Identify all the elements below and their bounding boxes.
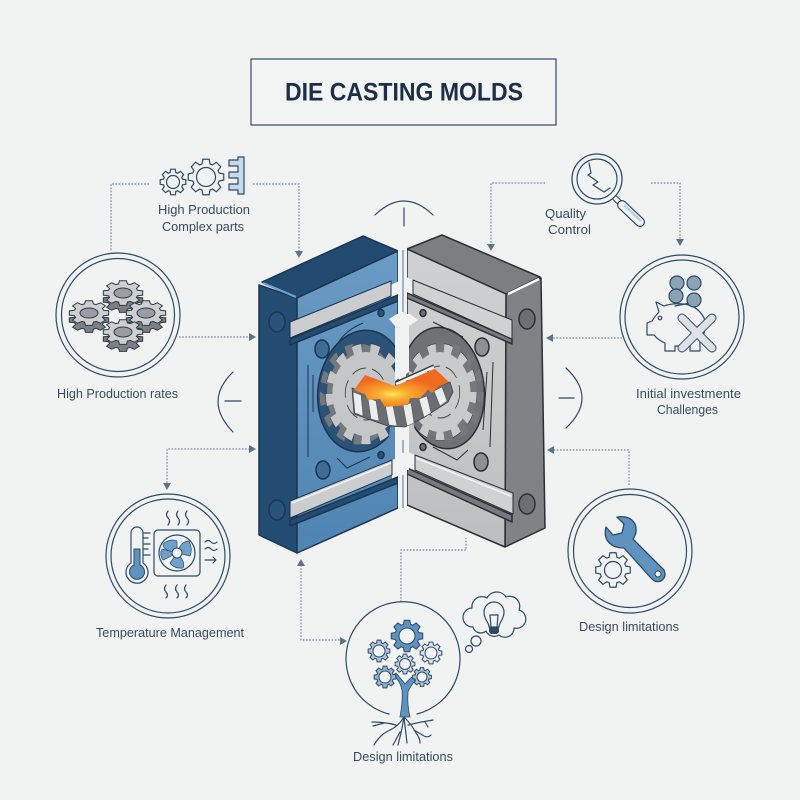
decorative arc: left — [218, 372, 241, 432]
molten metal — [354, 366, 449, 407]
label: High Production — [158, 203, 250, 217]
label: Design limitations — [579, 620, 679, 634]
title: DIE CASTING MOLDS — [285, 78, 523, 106]
right mold half (grey) — [394, 235, 545, 547]
connector arrow: investment to mold — [546, 334, 622, 342]
ring — [56, 253, 180, 377]
mounting holes right — [420, 309, 535, 514]
centre gap between mold halves — [398, 230, 407, 320]
ring — [568, 489, 692, 613]
top clamp strip left — [290, 295, 398, 345]
connector arrow: quality control to mold — [487, 183, 545, 251]
icon: magnifier with crack — [572, 154, 640, 222]
decorative arc: top — [375, 201, 433, 226]
ring — [106, 494, 230, 618]
label: Challenges — [657, 403, 718, 417]
label: Temperature Management — [96, 626, 245, 640]
left gear — [324, 348, 402, 440]
label: Design limitations — [353, 750, 453, 764]
connector arrow: tree to mold — [297, 559, 347, 645]
left mold half (blue) — [259, 236, 414, 553]
connector arrow: temperature to mold — [163, 445, 256, 490]
label: Initial investmente — [636, 387, 741, 401]
item: design limitations tree — [346, 592, 526, 764]
bottom clamp strip right — [407, 468, 512, 522]
item: high production complex parts — [158, 157, 250, 234]
connector arrow: complex parts to mold — [253, 184, 303, 258]
connector: tree to mold bottom — [401, 538, 466, 602]
icon: gear tree — [368, 620, 442, 745]
icon: four meshed gears — [69, 281, 166, 351]
connector arrow: quality control to investment — [651, 183, 684, 246]
icon: heat waves — [164, 511, 217, 598]
meshing gear teeth — [352, 382, 453, 427]
ring — [620, 255, 744, 379]
label: Control — [548, 223, 591, 237]
item: temperature management — [96, 494, 245, 640]
label — [158, 203, 250, 234]
label: Quality — [545, 207, 587, 221]
icon: thought cloud with light bulb — [463, 592, 526, 652]
top clamp strip right — [407, 293, 512, 344]
gear cavity right — [406, 326, 486, 450]
icon: thermometer — [126, 527, 150, 583]
connector arrow: high production rates to mold — [179, 333, 256, 341]
bottom clamp strip left — [290, 477, 398, 526]
gear cavity left — [316, 330, 397, 452]
icon: fan — [154, 530, 200, 576]
notches left — [391, 281, 399, 299]
icon: small gear — [596, 553, 630, 587]
label: High Production rates — [57, 387, 178, 401]
title — [251, 59, 556, 125]
ring — [346, 602, 460, 714]
icon: piggy bank with coins and cross — [647, 276, 712, 351]
mounting holes left — [269, 310, 384, 520]
notches right — [406, 277, 413, 294]
item: quality control — [545, 154, 640, 237]
icon: wrench — [605, 517, 665, 582]
item: initial investment challenges — [620, 255, 744, 417]
label: Complex parts — [162, 220, 244, 234]
label — [636, 387, 741, 417]
decorative arc: right — [559, 368, 582, 428]
central die casting mold — [259, 230, 545, 553]
item: design limitations wrench — [568, 489, 692, 634]
right gear — [407, 348, 480, 436]
connector: complex parts to high production rates — [111, 184, 149, 250]
connector arrow: design limitations to mold — [547, 446, 629, 485]
icon: gears and comb part — [160, 157, 244, 195]
label — [545, 207, 591, 237]
item: high production rates — [56, 253, 180, 401]
